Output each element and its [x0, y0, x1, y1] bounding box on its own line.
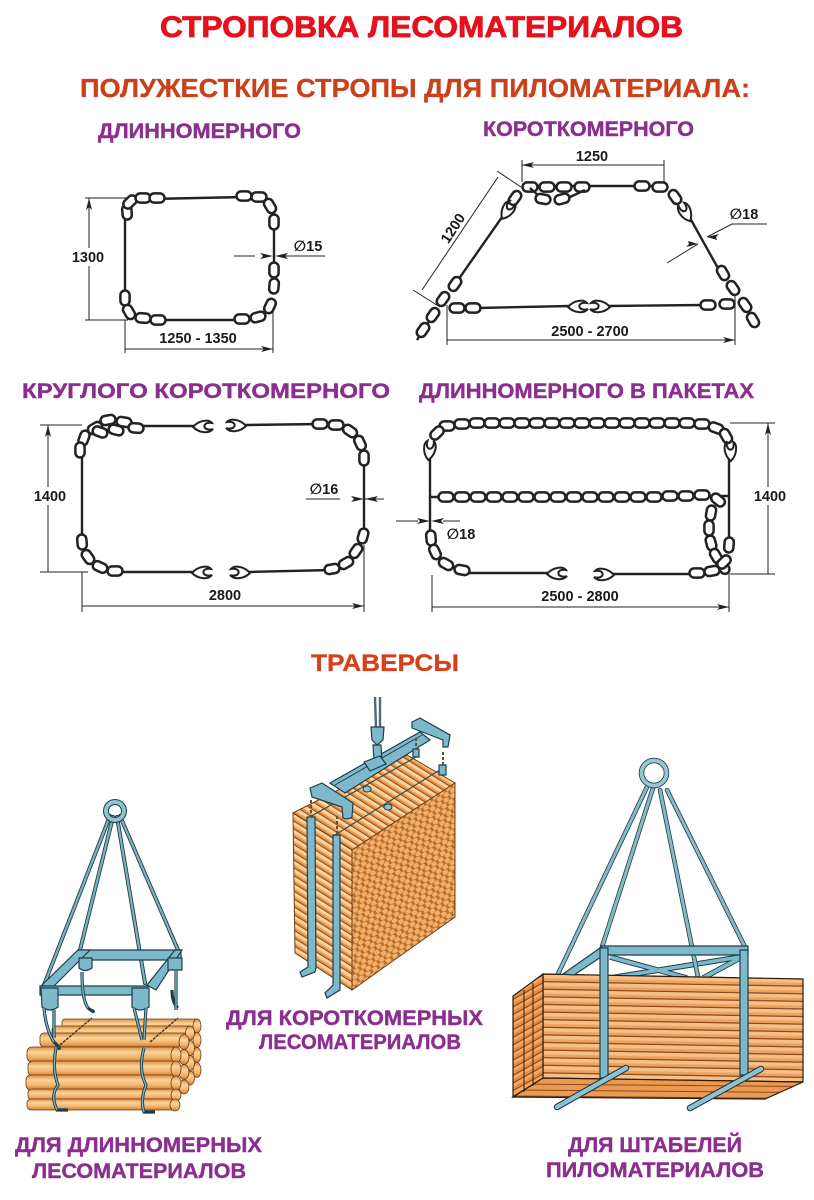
caption: lumber: ПИЛОМАТЕРИАЛОВ	[546, 1159, 764, 1182]
rods	[557, 1068, 761, 1108]
sling diagram: long in packs: 2500 - 2800	[541, 589, 619, 605]
illustration: traverse for long timber	[26, 802, 201, 1112]
beam	[330, 732, 430, 793]
sling diagram: round short lumber: 2800	[209, 588, 241, 604]
sling diagram: long in packs	[396, 418, 790, 612]
sling diagram: round short lumber: 1400	[34, 489, 66, 505]
label: long in packs: ДЛИННОМЕРНОГО В ПАКЕТАХ	[419, 380, 754, 403]
lumber block	[543, 974, 803, 1082]
frame	[563, 948, 607, 975]
illustration: traverse for lumber stacks	[513, 760, 803, 1108]
ropes	[558, 787, 745, 977]
caption: timber: ЛЕСОМАТЕРИАЛОВ	[259, 1031, 461, 1054]
ropes	[44, 816, 178, 985]
sling diagram: round short lumber	[30, 414, 384, 612]
heading: semi-rigid slings: ПОЛУЖЕСТКИЕ СТРОПЫ ДЛЯ ПИЛОМАТЕРИАЛА:	[80, 73, 750, 103]
caption: long timber: ДЛЯ ДЛИННОМЕРНЫХ	[15, 1134, 262, 1157]
label: round short: КРУГЛОГО КОРОТКОМЕРНОГО	[22, 380, 390, 403]
ring	[106, 802, 124, 820]
sling diagram: short lumber	[413, 149, 767, 345]
title: СТРОПОВКА ЛЕСОМАТЕРИАЛОВ	[160, 11, 683, 44]
sling diagram: long lumber: 1250 - 1350	[159, 331, 237, 347]
crane ropes	[375, 697, 380, 728]
sling diagram: long lumber: ∅15	[294, 239, 322, 255]
heading: traverses: ТРАВЕРСЫ	[311, 650, 459, 677]
label: short: КОРОТКОМЕРНОГО	[483, 118, 694, 141]
sling diagram: round short lumber: ∅16	[310, 482, 338, 498]
sling diagram: short lumber: 1250	[576, 149, 608, 165]
sling diagram: long in packs: ∅18	[447, 527, 475, 543]
sling diagram: short lumber: ∅18	[730, 207, 758, 223]
lumber stack	[293, 813, 352, 990]
sling diagram: long lumber	[68, 191, 325, 353]
ring	[642, 760, 666, 786]
sling diagram: long in packs: 1400	[754, 489, 786, 505]
frame	[78, 950, 181, 960]
chains and hooks	[44, 970, 178, 1112]
sling diagram: short lumber: 1200	[438, 211, 469, 247]
sling diagram: short lumber: 2500 - 2700	[551, 324, 629, 340]
illustration: traverse for short timber	[293, 697, 455, 998]
rear frame bracing	[610, 957, 740, 978]
sling diagram: long lumber: 1300	[72, 250, 104, 266]
caption: short timber: ДЛЯ КОРОТКОМЕРНЫХ	[226, 1007, 483, 1030]
logs	[26, 1019, 201, 1111]
caption: stacks: ДЛЯ ШТАБЕЛЕЙ	[568, 1133, 742, 1157]
label: long: ДЛИННОМЕРНОГО	[98, 120, 301, 143]
hanging rods	[300, 817, 316, 977]
caption: timber 2: ЛЕСОМАТЕРИАЛОВ	[32, 1160, 246, 1183]
